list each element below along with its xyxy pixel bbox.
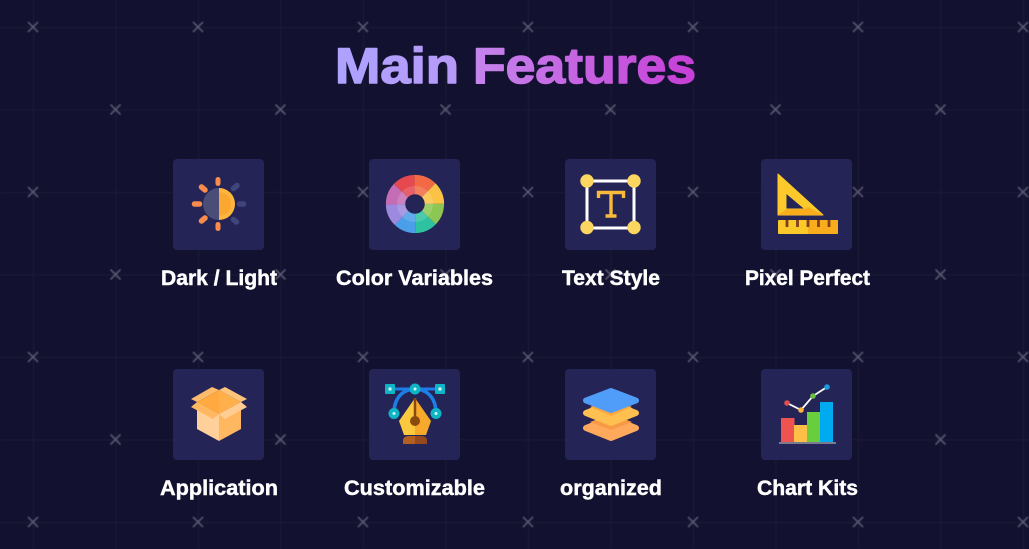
icon: set square and ruler — [778, 174, 838, 234]
icon: pen tool — [385, 384, 445, 444]
feature: organized — [565, 369, 656, 460]
icon: half sun — [194, 180, 244, 228]
icon card: Dark / Light — [173, 159, 264, 250]
label: Chart Kits: Chart Kits — [757, 477, 858, 500]
feature: Color Variables — [369, 159, 460, 250]
title — [335, 38, 696, 94]
icon: text box — [580, 174, 641, 234]
icon card: Chart Kits — [761, 369, 852, 460]
icon card: Pixel Perfect — [761, 159, 852, 250]
title: Main — [335, 38, 459, 94]
icon: layers — [586, 391, 636, 438]
label: Application: Application — [160, 477, 278, 500]
icon card: Color Variables — [369, 159, 460, 250]
icon card: Customizable — [369, 369, 460, 460]
label: organized: organized — [560, 477, 662, 500]
icon: color wheel — [396, 185, 434, 223]
feature: Customizable — [369, 369, 460, 460]
feature: Application — [173, 369, 264, 460]
label: Customizable: Customizable — [344, 477, 485, 500]
feature: Text Style — [565, 159, 656, 250]
icon: bar and line chart — [779, 384, 836, 444]
icon: open box — [191, 387, 247, 441]
title: Features — [473, 38, 696, 94]
label: Dark / Light: Dark / Light — [161, 267, 277, 290]
label: Color Variables: Color Variables — [336, 267, 493, 290]
label: Pixel Perfect: Pixel Perfect — [745, 267, 870, 290]
icon card: Text Style — [565, 159, 656, 250]
icon card: organized — [565, 369, 656, 460]
label: Text Style: Text Style — [562, 267, 660, 290]
icon card: Application — [173, 369, 264, 460]
feature: Chart Kits — [761, 369, 852, 460]
feature: Pixel Perfect — [761, 159, 852, 250]
feature: Dark / Light — [173, 159, 264, 250]
